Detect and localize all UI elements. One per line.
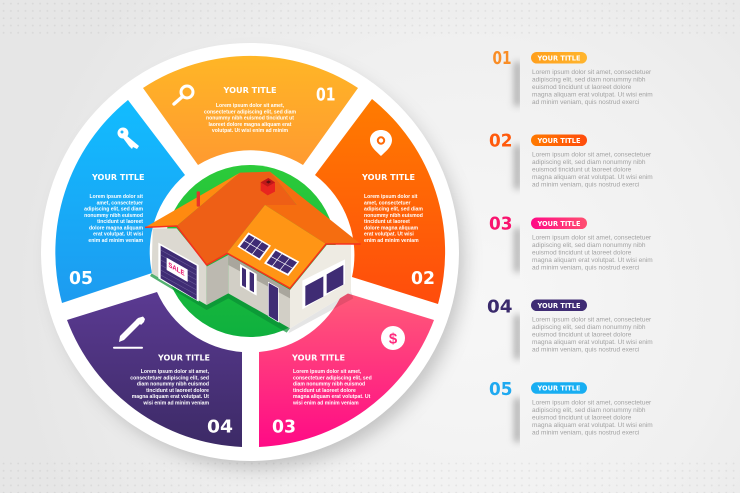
number 04: 04	[207, 416, 233, 438]
list text 02: ad minim veniam, quis nostrud exerci	[532, 182, 639, 188]
house illustration	[145, 172, 361, 333]
list text 03	[532, 234, 653, 272]
body text 04: Lorem ipsum dolor sit amet,	[141, 369, 210, 375]
list text 03: magna aliquam erat volutpat. Ut wisi enim	[532, 257, 653, 264]
body text 03: diam nonummy nibh euismod	[293, 382, 365, 388]
list text 04: ad minim veniam, quis nostrud exerci	[532, 347, 639, 354]
body text 02: adipiscing elit, sed diam	[364, 206, 423, 212]
list text 04: Lorem ipsum dolor sit amet, consectetuer	[532, 317, 652, 324]
body text 05: dolore magna aliquam	[89, 225, 143, 231]
icon: magnifier	[174, 86, 193, 104]
panel: list item 01	[492, 48, 653, 106]
number 02: 02	[411, 268, 435, 289]
list text 02	[532, 152, 653, 188]
panel: segment 05	[55, 100, 185, 303]
number 03: 03	[272, 416, 296, 438]
list text 01: adipiscing elit, sed diam nonummy nibh	[532, 76, 646, 84]
body text 01: consectetuer adipiscing elit, sed diam	[204, 109, 296, 115]
title 04: YOUR TITLE	[157, 354, 210, 362]
list text 02: Lorem ipsum dolor sit amet, consectetuer	[532, 152, 652, 158]
body text 04: magna aliquam erat volutpat. Ut	[132, 394, 209, 400]
panel: segment 04	[67, 292, 242, 447]
list text 02: magna aliquam erat volutpat. Ut wisi enim	[532, 174, 653, 181]
list number 03: 03	[489, 214, 512, 235]
list text 02: euismod tincidunt ut laoreet dolore	[532, 166, 632, 174]
body text 01	[204, 103, 296, 134]
panel shadows: right column	[514, 62, 521, 442]
list text 03: adipiscing elit, sed diam nonummy nibh	[532, 242, 646, 249]
icon: dollar coin	[381, 326, 405, 350]
title 01: YOUR TITLE	[222, 86, 276, 95]
title pill 05: YOUR TITLE	[537, 385, 581, 393]
sale sign	[167, 258, 188, 282]
title pill 01: YOUR TITLE	[537, 54, 581, 62]
front window	[240, 264, 257, 296]
segment shape 01	[143, 56, 358, 165]
vent pipe	[197, 191, 200, 207]
body text 04: diam nonummy nibh euismod	[137, 382, 209, 388]
body text 04: consectetuer adipiscing elit, sed	[130, 375, 209, 381]
body text 03: consectetuer adipiscing elit, sed	[293, 375, 372, 381]
body text 02: Lorem ipsum dolor sit	[364, 194, 418, 200]
list text 05: adipiscing elit, sed diam nonummy nibh	[532, 407, 646, 414]
list text 05	[532, 400, 653, 436]
roof	[145, 172, 361, 288]
body text 02: amet, consectetuer	[364, 200, 410, 206]
body text 04: tincidunt ut laoreet dolore	[146, 388, 209, 394]
title pill 01	[531, 52, 587, 64]
body text 02: tincidunt ut laoreet	[364, 219, 410, 225]
list text 04	[532, 317, 653, 354]
segment shape 02	[315, 99, 445, 304]
list text 05: euismod tincidunt ut laoreet dolore	[532, 414, 632, 422]
list text 05: Lorem ipsum dolor sit amet, consectetuer	[532, 400, 652, 406]
list text 01: magna aliquam erat volutpat. Ut wisi enim	[532, 92, 653, 98]
body text 04	[130, 369, 210, 406]
number 01: 01	[316, 84, 336, 106]
body text 02: enim ad minim veniam	[364, 238, 419, 244]
body text 01: laoreet dolore magna aliquam erat	[209, 122, 292, 128]
body text 05: enim ad minim veniam	[88, 238, 143, 244]
solar panel right	[264, 248, 299, 276]
body text 01: nonummy nibh euismod tincidunt ut	[206, 116, 294, 122]
body text 04: wisi enim ad minim veniam	[142, 400, 209, 406]
list text 03: ad minim veniam, quis nostrud exerci	[532, 264, 639, 272]
panel: segment 03	[259, 292, 434, 447]
panel: list item 04	[487, 297, 653, 354]
panel: segment 02	[315, 99, 445, 304]
door	[268, 282, 278, 322]
green lawn circle	[164, 165, 336, 337]
white circular base	[41, 43, 459, 461]
title pill 05	[531, 382, 587, 394]
icon: pen	[113, 316, 145, 349]
title pill 03	[531, 218, 587, 229]
list number 04: 04	[487, 297, 512, 318]
panel: segment 01	[143, 56, 358, 165]
list text 05: ad minim veniam, quis nostrud exerci	[532, 430, 639, 436]
garage door	[158, 243, 199, 302]
icon: key	[118, 128, 139, 149]
title 02: YOUR TITLE	[361, 173, 415, 182]
body text 05	[84, 194, 144, 244]
body text 03: tincidunt ut laoreet dolore	[293, 388, 356, 394]
list text 02: adipiscing elit, sed diam nonummy nibh	[532, 159, 646, 166]
segment shape 05	[55, 100, 185, 303]
body text 03: wisi enim ad minim veniam	[292, 400, 359, 406]
panel: list item 02	[489, 131, 653, 188]
list text 01: Lorem ipsum dolor sit amet, consectetuer	[532, 69, 652, 76]
circle shadow	[52, 56, 464, 468]
body text 01: Lorem ipsum dolor sit amet,	[216, 103, 285, 109]
title pill 04: YOUR TITLE	[537, 302, 581, 310]
body text 03	[292, 369, 372, 406]
sale text: SALE	[168, 262, 185, 278]
list number 01: 01	[492, 48, 512, 69]
list number 02: 02	[489, 131, 512, 152]
list text 04: magna aliquam erat volutpat. Ut wisi enim	[532, 339, 653, 346]
chimney	[261, 178, 275, 195]
body text 05: Lorem ipsum dolor sit	[90, 194, 143, 200]
walls	[152, 228, 351, 328]
title pill 04	[531, 300, 587, 311]
body text 05: tincidunt ut laoreet	[97, 219, 143, 225]
title pill 02: YOUR TITLE	[537, 137, 581, 145]
list number 05: 05	[489, 379, 512, 400]
title 03: YOUR TITLE	[291, 354, 345, 362]
segment shape 03	[259, 292, 434, 447]
solar panel left	[237, 232, 271, 261]
segment shape 04	[67, 292, 242, 447]
list text 01: euismod tincidunt ut laoreet dolore	[532, 84, 632, 91]
title pill 02	[531, 134, 587, 146]
body text 03: magna aliquam erat volutpat. Ut	[293, 394, 371, 400]
icon: dollar coin: $	[389, 330, 398, 348]
body text 03: Lorem ipsum dolor sit amet,	[293, 369, 362, 375]
list text 04: euismod tincidunt ut laoreet dolore	[532, 332, 632, 339]
list text 03: euismod tincidunt ut laoreet dolore	[532, 250, 632, 256]
list text 03: Lorem ipsum dolor sit amet, consectetuer	[532, 234, 652, 242]
panel: list item 03	[489, 214, 653, 272]
icon: map pin	[370, 130, 392, 156]
body text 01: volutpat. Ut wisi enim ad minim	[212, 128, 289, 134]
body text 02: erat volutpat. Ut wisi	[364, 232, 414, 238]
ground shadows	[150, 273, 353, 333]
body text 05: erat volutpat. Ut wisi	[93, 232, 144, 238]
title pill 03: YOUR TITLE	[537, 220, 581, 228]
body text 05: adipiscing elit, sed diam	[84, 206, 143, 212]
list text 05: magna aliquam erat volutpat. Ut wisi enim	[532, 422, 653, 429]
right windows	[302, 259, 345, 309]
list text 04: adipiscing elit, sed diam nonummy nibh	[532, 324, 646, 331]
body text 05: amet, consectetuer	[97, 200, 143, 206]
panel: list item 05	[489, 379, 653, 436]
title 05: YOUR TITLE	[91, 173, 144, 182]
number 05: 05	[69, 268, 93, 289]
body text 05: nonummy nibh euismod	[84, 213, 143, 219]
body text 02: dolore magna aliquam	[364, 225, 419, 231]
body text 02: nonummy nibh euismod	[364, 213, 423, 219]
list text 01	[532, 69, 653, 106]
list text 01: ad minim veniam, quis nostrud exerci	[532, 99, 639, 106]
body text 02	[364, 194, 423, 244]
